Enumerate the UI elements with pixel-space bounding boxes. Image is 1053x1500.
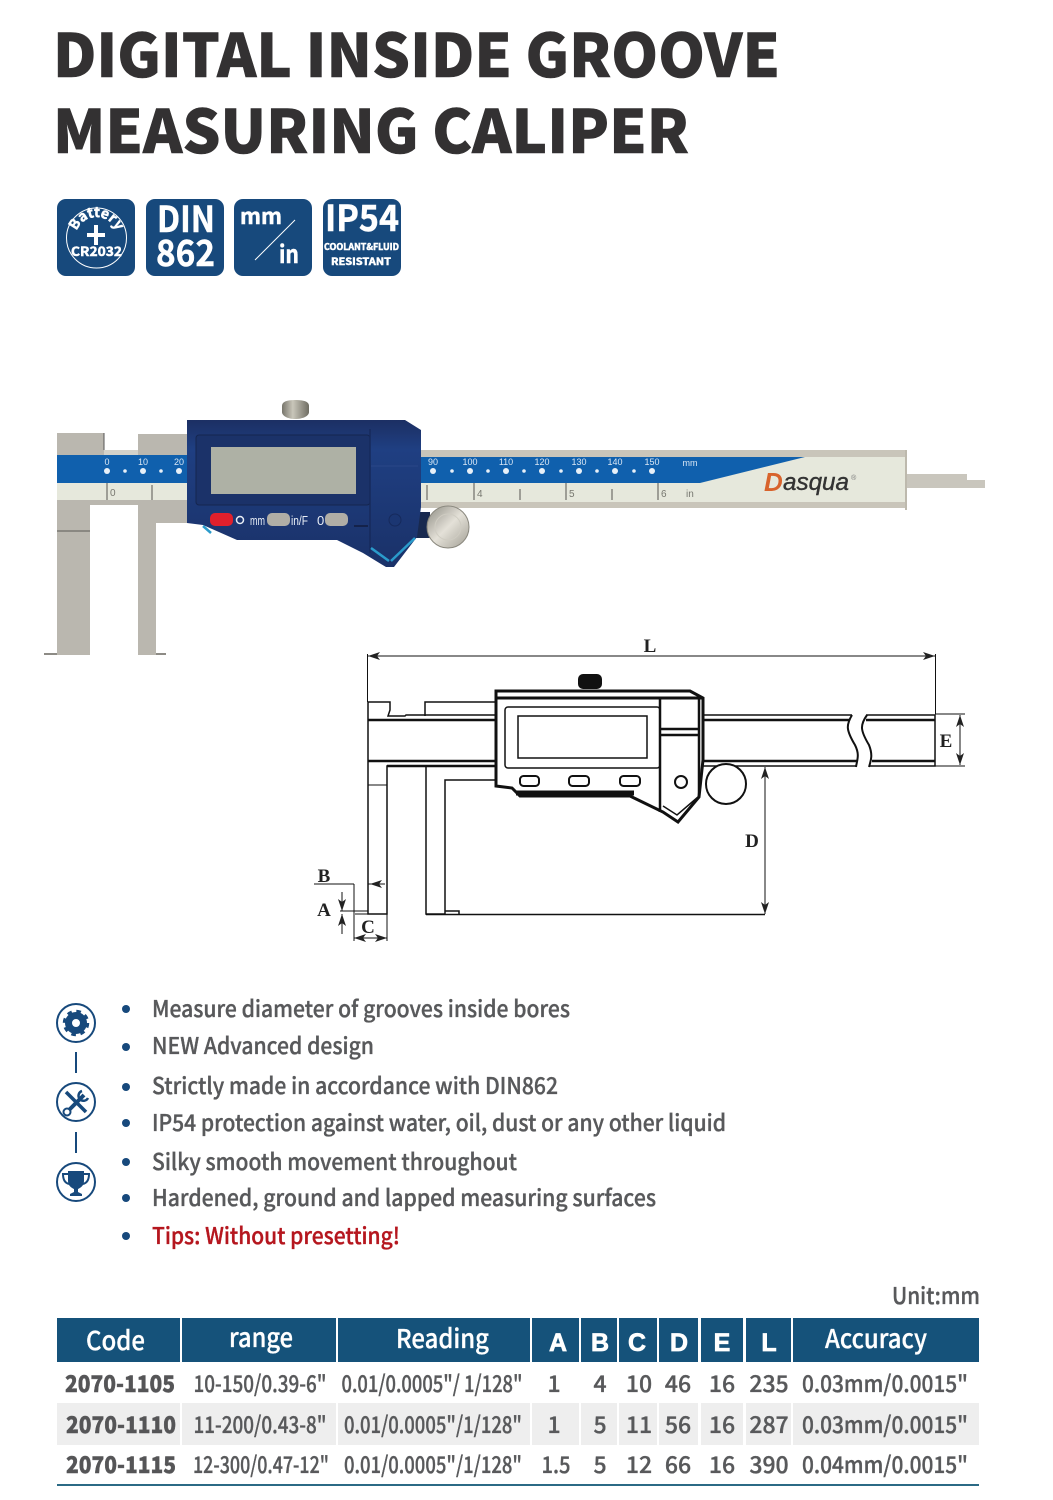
dimensions A, B, C	[314, 866, 387, 941]
row: 2070-1115: 1.5	[542, 1446, 570, 1480]
icon: tools	[57, 1083, 95, 1121]
row: 2070-1110: 16	[709, 1406, 735, 1440]
scale marks: 110	[499, 457, 513, 467]
row: 2070-1115: 390	[749, 1446, 789, 1480]
technical drawing with dimensions	[314, 636, 965, 941]
row: 2070-1115	[66, 1446, 968, 1480]
table header	[57, 1318, 979, 1362]
scale marks: 6	[661, 489, 667, 500]
row: 2070-1105: 1	[547, 1365, 561, 1399]
row: 2070-1105	[65, 1365, 968, 1399]
table header: Accuracy	[825, 1319, 927, 1356]
badge: battery CR2032: CR2032	[71, 241, 122, 260]
icon: trophy	[57, 1163, 95, 1201]
row: 2070-1110: 11-200/0.43-8"	[194, 1406, 326, 1440]
scale marks: 5	[569, 489, 575, 500]
row: 2070-1110: 1	[547, 1406, 561, 1440]
title: DIGITAL INSIDE GROOVE	[53, 8, 780, 95]
dimensions A, B, C: A	[317, 900, 331, 921]
row: 2070-1110: 287	[749, 1406, 789, 1440]
badge: DIN 862: DIN	[157, 191, 215, 243]
feature list: Strictly made in accordance with DIN862	[152, 1067, 558, 1101]
row: 2070-1105: 0.03mm/0.0015"	[802, 1365, 968, 1399]
row: 2070-1115: 0.01/0.0005"/1/128"	[344, 1446, 522, 1480]
table header: B	[591, 1329, 609, 1357]
scale marks: 140	[607, 457, 623, 467]
dimension L: L	[644, 636, 656, 657]
row: 2070-1105: 16	[709, 1365, 735, 1399]
brand logo: D	[764, 467, 783, 497]
caliper outline	[355, 702, 935, 914]
scale marks: 10	[138, 457, 148, 467]
row: 2070-1110: 2070-1110	[66, 1406, 176, 1440]
row backgrounds	[57, 1403, 979, 1445]
row: 2070-1115: 0.04mm/0.0015"	[802, 1446, 968, 1480]
table header: A	[549, 1329, 567, 1357]
icon: gear	[57, 1004, 95, 1042]
scale marks: 150	[644, 457, 660, 467]
scale marks: 20	[174, 457, 184, 467]
specification table	[57, 1318, 979, 1486]
dimensions A, B, C: C	[361, 917, 375, 938]
badge: battery CR2032	[57, 199, 135, 276]
row: 2070-1110	[66, 1406, 968, 1440]
table header: range	[229, 1318, 293, 1355]
row: 2070-1110: 5	[593, 1406, 607, 1440]
dimension E: E	[940, 731, 952, 752]
row: 2070-1110: 0.01/0.0005"/1/128"	[344, 1406, 522, 1440]
drawing body	[496, 674, 746, 822]
feature list	[122, 990, 726, 1251]
dimension L	[368, 636, 936, 714]
feature list: Measure diameter of grooves inside bores	[152, 990, 570, 1024]
badge: mm / in	[234, 199, 312, 276]
main beam	[57, 450, 907, 510]
row: 2070-1105: 2070-1105	[65, 1365, 175, 1399]
icon column	[57, 1004, 95, 1201]
brand logo	[764, 467, 857, 497]
table header: Code	[86, 1321, 145, 1358]
row: 2070-1105: 0.01/0.0005"/ 1/128"	[342, 1365, 522, 1399]
scale marks: 120	[534, 457, 550, 467]
row: 2070-1105: 235	[749, 1365, 789, 1399]
title: MEASURING CALIPER	[53, 84, 689, 171]
row: 2070-1115: 16	[709, 1446, 735, 1480]
feature badges	[57, 190, 401, 277]
depth bar	[907, 474, 985, 488]
table header: E	[714, 1329, 730, 1357]
badge: DIN 862: 862	[156, 225, 215, 277]
dimension E	[935, 714, 965, 766]
buttons and labels	[210, 513, 348, 528]
buttons and labels: in/F	[291, 513, 308, 528]
scale marks: 0	[104, 457, 110, 467]
scale marks: 130	[571, 457, 587, 467]
badge: IP54: COOLANT&FLUID	[324, 240, 399, 253]
feature list: Hardened, ground and lapped measuring surfaces	[152, 1179, 656, 1213]
dimension D: D	[745, 831, 759, 852]
row: 2070-1115: 5	[593, 1446, 607, 1480]
unit label: Unit:mm	[892, 1277, 980, 1311]
table header: C	[628, 1329, 646, 1357]
row: 2070-1105: 10-150/0.39-6"	[194, 1365, 326, 1399]
scale marks: 90	[428, 457, 438, 467]
row: 2070-1115: 12	[626, 1446, 652, 1480]
title	[53, 8, 780, 171]
scale marks: mm	[682, 458, 698, 468]
top screw	[282, 400, 309, 419]
feature list: Silky smooth movement throughout	[152, 1143, 517, 1177]
dimensions A, B, C: B	[318, 866, 331, 887]
table header: L	[761, 1329, 777, 1357]
LCD screen	[211, 447, 356, 494]
fixed jaw	[44, 433, 187, 655]
row: 2070-1105: 4	[593, 1365, 607, 1399]
row: 2070-1115: 66	[665, 1446, 691, 1480]
feature list: IP54 protection against water, oil, dust or any other liquid	[152, 1104, 726, 1138]
badge: IP54: RESISTANT	[331, 253, 391, 268]
buttons and labels: 0	[317, 513, 324, 528]
scale marks: in	[686, 489, 694, 500]
badge: mm / in: mm	[240, 201, 282, 231]
display body	[187, 420, 421, 567]
feature list: NEW Advanced design	[152, 1027, 374, 1061]
scale marks: 100	[462, 457, 478, 467]
row: 2070-1110: 56	[665, 1406, 691, 1440]
row: 2070-1105: 46	[665, 1365, 691, 1399]
feature list: Tips: Without presetting!	[152, 1217, 400, 1251]
badge: battery CR2032: Battery	[68, 206, 124, 230]
row: 2070-1110: 11	[626, 1406, 652, 1440]
brand logo: asqua	[783, 469, 849, 496]
table header: Reading	[396, 1319, 489, 1356]
scale marks: 4	[477, 489, 483, 500]
row: 2070-1110: 0.03mm/0.0015"	[802, 1406, 968, 1440]
badge: mm / in: in	[279, 235, 299, 270]
thumb wheel	[395, 506, 469, 548]
row: 2070-1115: 2070-1115	[66, 1446, 176, 1480]
badge: IP54: IP54	[325, 190, 399, 242]
scale marks	[104, 457, 698, 500]
scale marks: 0	[110, 488, 116, 499]
badge: IP54	[323, 190, 401, 276]
table header: D	[670, 1329, 688, 1357]
product photo: digital caliper	[44, 400, 985, 655]
brand logo: ®	[851, 474, 857, 482]
row: 2070-1115: 12-300/0.47-12"	[193, 1446, 329, 1480]
row: 2070-1105: 10	[626, 1365, 652, 1399]
badge: DIN 862	[146, 191, 224, 277]
buttons and labels: mm	[250, 513, 265, 528]
